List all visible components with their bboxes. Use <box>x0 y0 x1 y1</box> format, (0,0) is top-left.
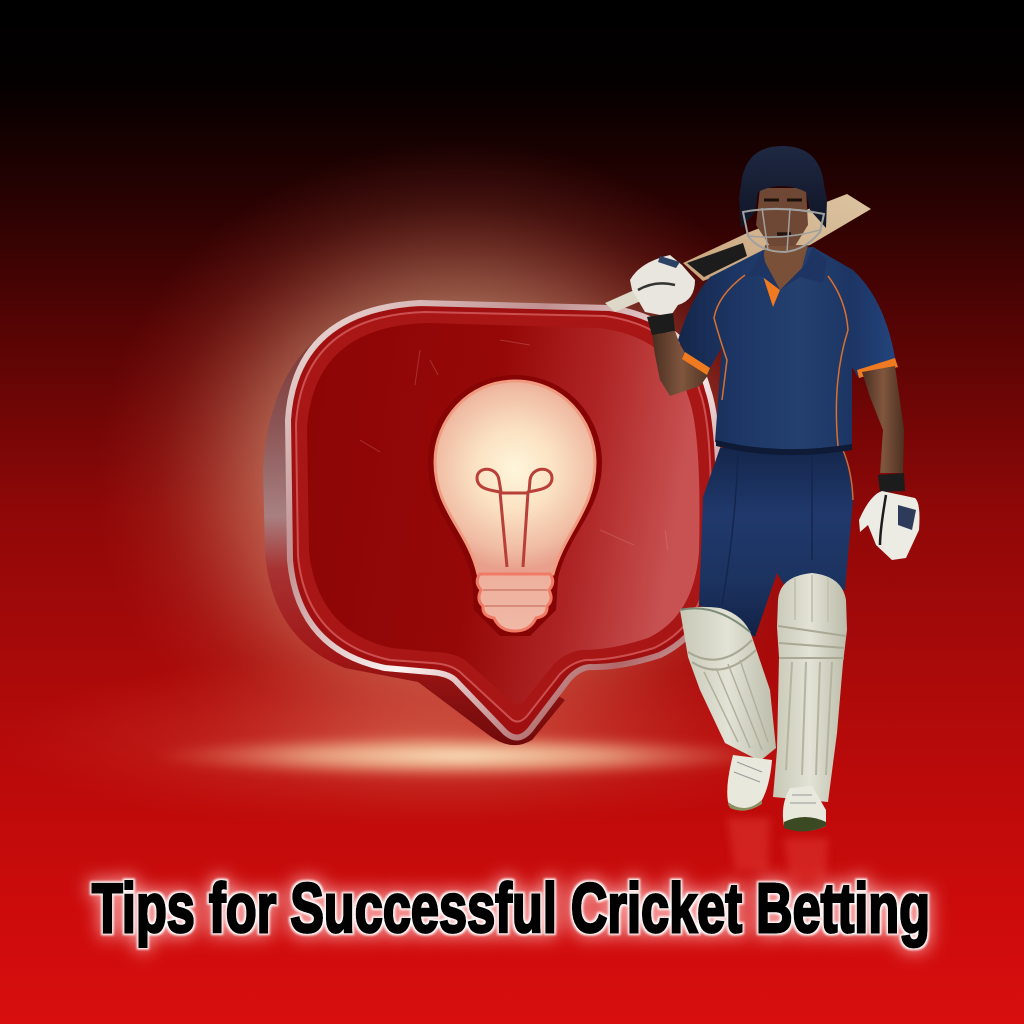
left shoe <box>727 755 772 811</box>
bulb screw base <box>477 574 553 631</box>
speech bubble with light bulb <box>263 303 719 745</box>
bubble scratches <box>360 340 668 550</box>
right arm <box>862 366 904 473</box>
cricket player <box>605 146 920 880</box>
wristband <box>647 313 675 335</box>
right leg pad <box>773 573 847 802</box>
bat <box>605 194 871 312</box>
lower wristband <box>878 473 905 492</box>
bubble extrusion side <box>263 305 565 745</box>
bulb filament <box>477 469 552 567</box>
right shoe <box>783 786 826 832</box>
reflection of shoes <box>727 818 828 880</box>
helmet and face <box>739 146 827 252</box>
left leg pad <box>680 607 776 761</box>
collar <box>747 247 827 307</box>
left arm <box>652 331 712 396</box>
shirt <box>678 247 898 455</box>
trousers <box>699 448 853 637</box>
upper glove <box>630 255 695 317</box>
bubble chrome rim and face <box>288 303 719 738</box>
icon: light bulb <box>428 375 602 636</box>
lower glove <box>859 491 920 560</box>
neck <box>762 245 808 290</box>
